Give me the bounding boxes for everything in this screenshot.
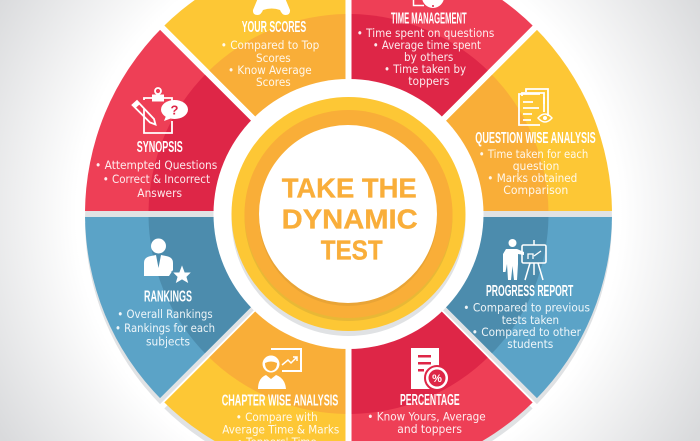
text: rankings: • Overall Rankings (117, 307, 213, 321)
text: time management: by others (404, 50, 453, 64)
wheel shadow (85, 211, 612, 441)
icon: chapter wise analysis teacher with board (258, 349, 301, 389)
text: your scores: • Compared to Top (221, 38, 319, 52)
icon: time management clock (414, 0, 444, 8)
text: progress report: tests taken (502, 313, 559, 327)
text: question wise analysis: QUESTION WISE ANALYSIS (475, 130, 596, 147)
text: synopsis: Answers (137, 186, 182, 200)
text: progress report: students (507, 337, 553, 351)
title (282, 172, 418, 266)
text: your scores: YOUR SCORES (242, 19, 306, 36)
icon: synopsis clipboard: ? (171, 102, 179, 118)
wheel segment: percentage (352, 312, 532, 441)
wheel segment: synopsis (85, 30, 251, 211)
text: rankings: • Rankings for each (115, 321, 215, 335)
wheel segment: progress report (446, 217, 612, 398)
text: your scores: • Know Average (228, 63, 312, 77)
icon: your scores person (253, 0, 290, 15)
text: question wise analysis (475, 130, 596, 197)
text: time management: • Time taken by (384, 62, 466, 76)
text: time management (357, 10, 494, 88)
text: question wise analysis: • Time taken for each (479, 147, 588, 161)
text: rankings: subjects (146, 335, 190, 349)
icon: percentage document: % (432, 373, 442, 385)
title: TEST (321, 234, 383, 266)
text: percentage: • Know Yours, Average (367, 410, 486, 424)
text: your scores (221, 19, 319, 89)
text: time management: • Average time spent (373, 38, 481, 52)
icon: question wise analysis document (519, 89, 552, 125)
text: time management: • Time spent on questions (357, 26, 494, 40)
text: chapter wise analysis: • Compare with (236, 410, 318, 424)
icon: percentage document (411, 348, 449, 390)
text: question wise analysis: question (513, 159, 559, 173)
text: time management: TIME MANAGEMENT (391, 10, 467, 28)
text: percentage: and toppers (397, 422, 462, 436)
icon: rankings person with star (144, 238, 192, 284)
central hub (214, 79, 484, 349)
title: TAKE THE (282, 172, 417, 204)
wheel segment: time management (352, 0, 533, 116)
text: progress report: • Compared to previous (463, 301, 590, 315)
text: progress report (463, 283, 590, 351)
text: chapter wise analysis: CHAPTER WISE ANALYSIS (222, 393, 338, 410)
text: percentage (367, 392, 486, 436)
text: synopsis: • Attempted Questions (95, 158, 217, 172)
icon: progress report presenter (503, 239, 546, 280)
wheel segment: question wise analysis (446, 30, 612, 211)
text: synopsis: SYNOPSIS (137, 139, 183, 156)
text: your scores: Scores (256, 75, 291, 89)
text: percentage: PERCENTAGE (400, 392, 460, 409)
text: progress report: • Compared to other (472, 325, 581, 339)
text: synopsis (95, 139, 217, 200)
text: your scores: Scores (256, 51, 291, 65)
text: chapter wise analysis: Average Time & Marks (222, 423, 339, 437)
text: time management: toppers (408, 74, 449, 88)
text: rankings: RANKINGS (144, 289, 192, 306)
text: synopsis: • Correct & Incorrect (103, 172, 210, 186)
text: rankings (115, 289, 215, 349)
text: question wise analysis: • Marks obtained (487, 171, 577, 185)
text: progress report: PROGRESS REPORT (486, 283, 573, 300)
wheel segment: your scores (164, 0, 346, 116)
text: chapter wise analysis (222, 393, 339, 441)
icon: synopsis clipboard (132, 88, 188, 133)
title: DYNAMIC (282, 204, 418, 234)
wheel segment: rankings (85, 217, 251, 398)
text: question wise analysis: Comparison (503, 183, 568, 197)
wheel segment: chapter wise analysis (164, 312, 346, 441)
